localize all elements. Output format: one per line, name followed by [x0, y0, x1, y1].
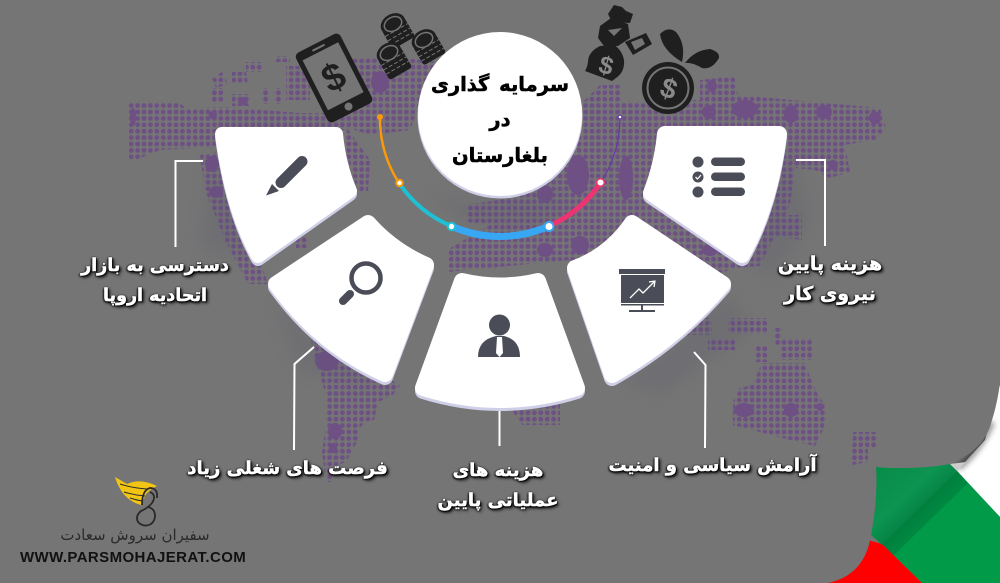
arc timeline [377, 114, 622, 236]
icon: coin stacks [373, 9, 446, 80]
logo text: company name: سفیران سروش سعادت [60, 526, 210, 544]
label: low operating costs [436, 460, 560, 515]
title circle [418, 32, 582, 198]
label: low operating costs: عملیاتی پایین [438, 490, 558, 511]
card: chart [575, 223, 723, 378]
label: EU market access: اتحادیه اروپا [103, 286, 207, 306]
label: low labour cost: هزینه پایین [778, 253, 882, 275]
label: low labour cost: نیروی کار [784, 283, 876, 305]
title text: second line: در [489, 108, 511, 131]
icon: phone with dollar [294, 32, 374, 124]
title text: سرمایه گذاری [431, 73, 569, 96]
icon: person with tie [478, 314, 520, 357]
website url: WWW.PARSMOHAJERAT.COM [20, 549, 246, 566]
label: political calm and security: آرامش سیاسی و امنیت [608, 455, 817, 476]
title text: third line: بلغارستان [452, 144, 548, 167]
icon: pencil [266, 162, 302, 196]
label: EU market access: دسترسی به بازار [81, 256, 229, 276]
icon: checklist [692, 156, 745, 198]
icon: dollar coin with leaves: $ [656, 71, 682, 106]
icon: dollar coin with leaves [642, 29, 719, 114]
card: pencil [222, 134, 350, 259]
card: person [423, 281, 577, 403]
icon: presentation board with rising arrow [619, 269, 665, 311]
leader lines [176, 160, 825, 450]
icon: magnifier [343, 264, 380, 301]
label: low operating costs: هزینه های [453, 460, 543, 481]
bulgarian flag page curl [760, 300, 1000, 583]
soft glows behind cards [200, 138, 810, 395]
card: magnifier [276, 223, 426, 377]
logo: winged swan [115, 477, 157, 526]
label: low labour cost [776, 253, 885, 309]
card: checklist [651, 134, 779, 258]
icon: hand holding money bag [585, 5, 652, 81]
label: EU market access [78, 256, 232, 310]
icon: hand holding money bag: $ [596, 51, 616, 81]
label: many job opportunities: فرصت های شغلی زیاد [187, 458, 388, 479]
icon: phone with dollar: $ [315, 54, 353, 102]
dotted world map [129, 56, 886, 482]
